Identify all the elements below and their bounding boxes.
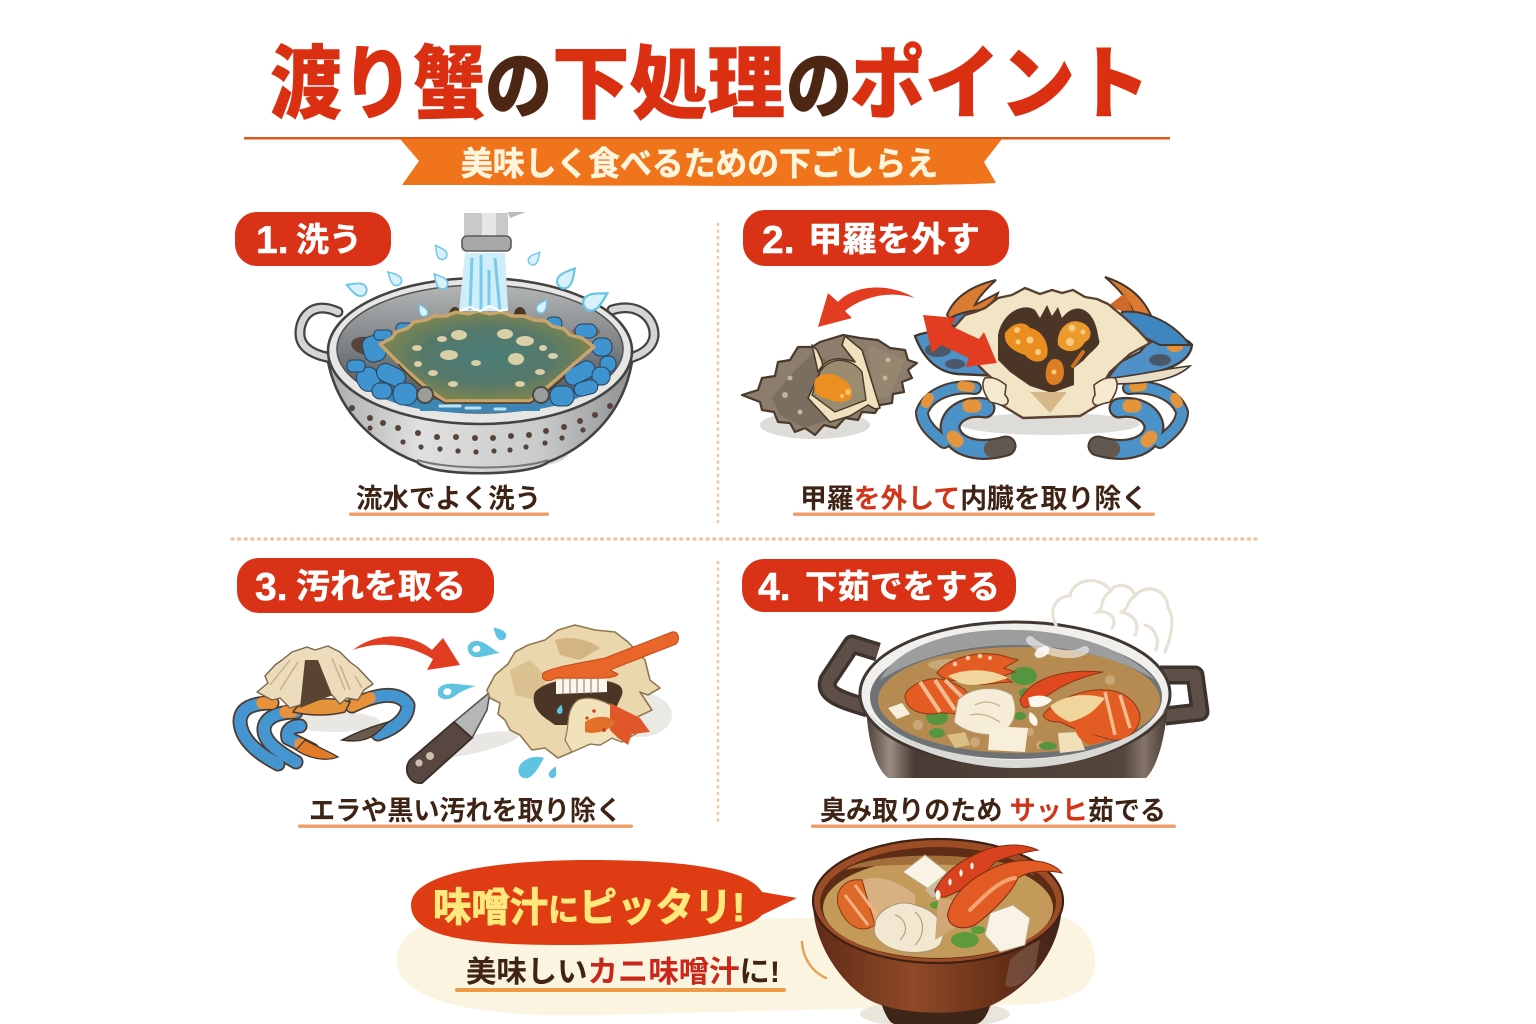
step 1 badge bbox=[235, 212, 391, 266]
speech bubble bbox=[411, 860, 797, 945]
title: 渡り蟹 bbox=[270, 40, 485, 129]
title: の bbox=[786, 45, 852, 128]
icon: water drops bbox=[438, 624, 564, 779]
arrow: next step bbox=[353, 636, 460, 670]
step 2 caption: 甲羅を外して内臓を取り除く bbox=[800, 484, 1148, 514]
step 2 badge: 甲羅を外す bbox=[808, 221, 980, 259]
step 4 badge bbox=[742, 559, 1016, 612]
section dividers bbox=[232, 224, 1258, 826]
step 1 badge: 洗う bbox=[296, 221, 362, 258]
arrow: lift shell bbox=[818, 288, 915, 327]
icon: miso soup bowl bbox=[813, 839, 1063, 1024]
icon: shell being brushed bbox=[487, 625, 679, 758]
step 4 badge: 4. bbox=[758, 566, 791, 609]
step 2 badge: 2. bbox=[762, 219, 795, 262]
panel: step 4 parboil bbox=[742, 559, 1200, 828]
accent arc bbox=[802, 942, 826, 978]
step 2 badge bbox=[743, 210, 1009, 266]
step 3 badge: 汚れを取る bbox=[296, 568, 466, 606]
subtitle ribbon: 美味しく食べるための下ごしらえ bbox=[461, 145, 938, 182]
icon: steam bbox=[1053, 581, 1172, 652]
step 3 caption: エラや黒い汚れを取り除く bbox=[309, 796, 622, 826]
icon: knife bbox=[407, 692, 521, 783]
step 3 badge: 3. bbox=[255, 566, 288, 609]
speech bubble: 味噌汁にピッタリ! bbox=[433, 886, 745, 930]
step 1 caption: 流水でよく洗う bbox=[356, 484, 541, 514]
icon: crab with gills bbox=[240, 646, 408, 764]
icon: open crab with organs bbox=[915, 277, 1192, 449]
title bbox=[270, 40, 1150, 129]
step 3 badge bbox=[237, 558, 494, 613]
subtitle ribbon bbox=[244, 137, 1170, 186]
panel: step 2 remove shell bbox=[742, 210, 1192, 516]
panel: step 3 clean bbox=[237, 558, 679, 828]
arrow: double-headed bbox=[923, 315, 997, 367]
icon: removed shell bbox=[742, 335, 917, 439]
icon: colander with crab under running water bbox=[300, 278, 654, 473]
icon: pot with crab bbox=[827, 622, 1200, 778]
panel: miso soup callout bbox=[397, 839, 1095, 1024]
title: の bbox=[485, 45, 552, 128]
icon: water droplets bbox=[345, 243, 611, 318]
callout subtext: 美味しいカニ味噌汁に! bbox=[466, 956, 780, 989]
panel: step 1 wash bbox=[235, 212, 654, 516]
cream background blob bbox=[397, 915, 1095, 1015]
icon: faucet and water stream bbox=[459, 212, 526, 312]
step 4 badge: 下茹でをする bbox=[805, 568, 1000, 605]
step 1 badge: 1. bbox=[256, 219, 289, 262]
step 4 caption: 臭み取りのため サッヒ茹でる bbox=[820, 796, 1166, 826]
title: 下処理 bbox=[552, 40, 785, 129]
title: ポイント bbox=[850, 40, 1150, 129]
